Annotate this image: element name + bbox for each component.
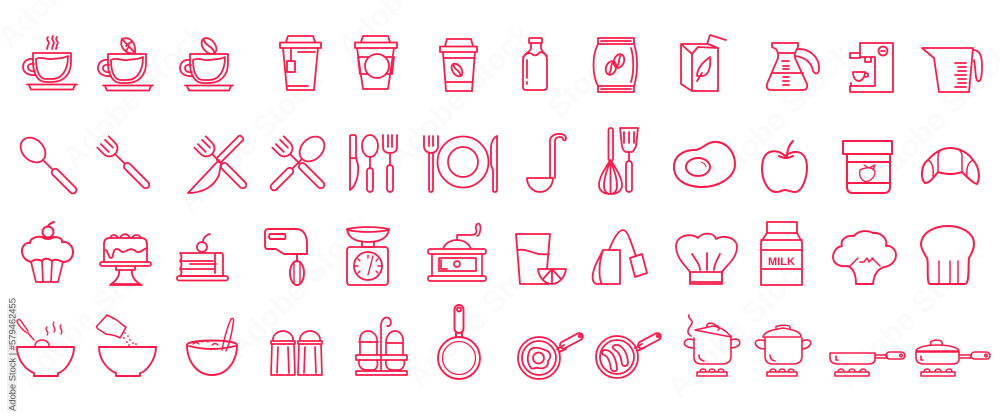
icon: glass with lime slice (516, 234, 566, 284)
icon: frying pan (438, 305, 480, 379)
icon: cake on stand (100, 234, 151, 285)
watermark pattern: Adobe Stock (380, 16, 539, 175)
icon: pan with fried egg (518, 332, 584, 379)
icon: cupcake (22, 222, 73, 282)
icon: chef hat (676, 234, 737, 284)
icon: tea bag (593, 230, 647, 284)
icon: salt pouring into bowl (97, 315, 156, 376)
icon: crossed fork and knife (188, 135, 251, 193)
icon: condiment caddy (356, 317, 407, 375)
icon: milk carton (761, 222, 802, 285)
icon: crossed fork and spoon (264, 132, 329, 197)
watermark pattern: Adobe Stock (220, 206, 379, 365)
icon: cup with bean (180, 35, 233, 90)
watermark pattern: Adobe Stock (830, 236, 989, 395)
watermark pattern: Adobe Stock (170, 61, 329, 220)
icon: whisk and spatula (599, 128, 638, 194)
icon: covered skillet on burner (916, 340, 990, 376)
icon: apple (762, 141, 807, 192)
icon: croissant (922, 148, 979, 184)
icon: fork (97, 136, 154, 193)
icon: takeaway tea cup (280, 36, 321, 90)
icon: ladle (527, 134, 566, 192)
icon: broccoli (833, 231, 896, 284)
icon: boiling pot on burner (684, 315, 740, 376)
watermark pattern: Adobe Stock (400, 236, 559, 395)
icon: hand mixer (265, 229, 307, 285)
icon: measuring cup (922, 48, 982, 92)
icon: fried egg (674, 142, 735, 187)
icon: knife, spoon and fork (350, 135, 397, 192)
icon: cake slice with cherry (177, 234, 228, 280)
icon: strawberry jam jar (843, 141, 892, 193)
icon: porridge bowl with spoon (187, 318, 237, 375)
icon: coffee grinder (428, 224, 486, 281)
watermark pattern: Adobe Stock (55, 16, 214, 175)
icon: salt and pepper shakers (271, 331, 322, 375)
watermark pattern: Stock (540, 40, 625, 125)
watermark pattern: Adobe Stock (660, 246, 819, 405)
icon: plate with fork and knife (424, 136, 497, 192)
watermark pattern: Adobe Stock (700, 36, 859, 195)
icon: takeaway cup with sleeve (355, 36, 397, 89)
icon: takeaway coffee cup (440, 39, 477, 91)
icon: coffee bag (594, 38, 637, 92)
icon: covered pot on burner (755, 325, 811, 376)
icon: pan with sausages (596, 332, 662, 378)
watermark pattern: Adobe Stock (10, 236, 169, 395)
icon: kitchen scale (347, 227, 389, 285)
icon: milk bottle (523, 38, 547, 90)
icon: coffee carafe (767, 43, 819, 90)
milk label: MILK (768, 256, 795, 268)
icon: espresso machine (850, 43, 893, 92)
stock id label: Adobe Stock | #579462455 (6, 298, 18, 411)
icon: toast-shaped chef hat (921, 226, 974, 284)
icon: spoon (16, 133, 83, 200)
icon: steaming cup (23, 36, 77, 90)
icon: skillet on burner (830, 352, 905, 376)
icon: juice carton (681, 35, 726, 91)
icon: cup with leaf (98, 38, 153, 90)
icon: mixing bowl with spoon (17, 320, 74, 376)
